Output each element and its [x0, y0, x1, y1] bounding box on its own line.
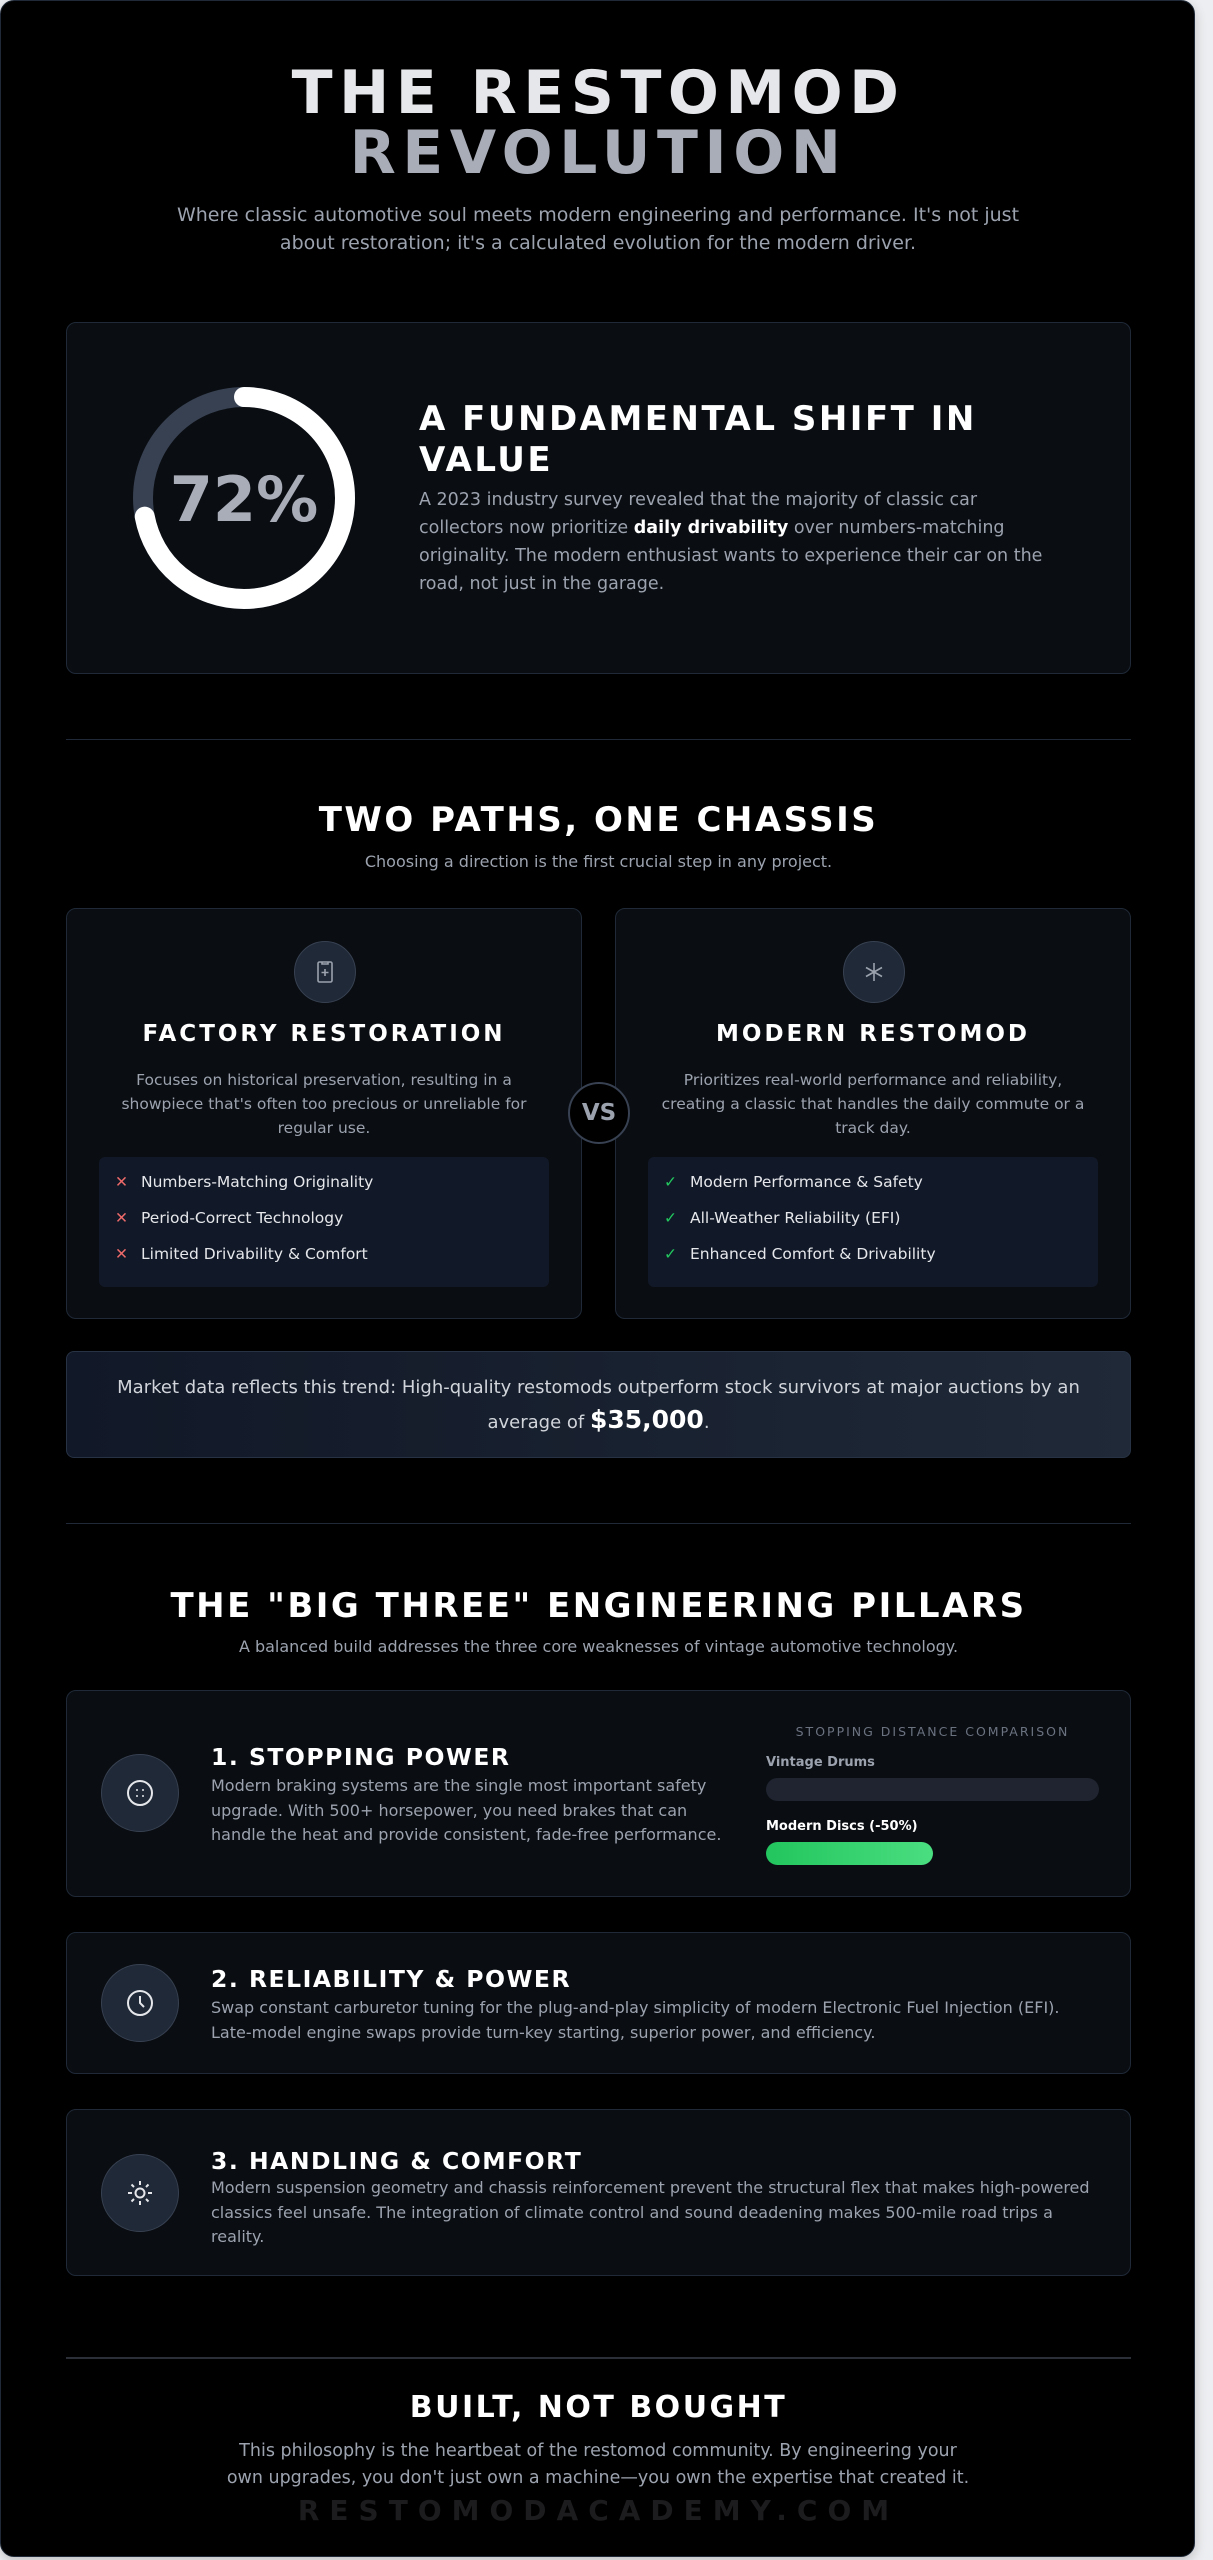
list: drawbacks: ✕ [115, 1245, 128, 1263]
pillar description: Late-model engine swaps provide turn-key starting, superior power, and efficiency. [211, 2022, 875, 2042]
panel: reliability [66, 1932, 1131, 2074]
footer text: This philosophy is the heartbeat of the restomod community. By engineering your [239, 2441, 957, 2461]
panel: stopping power [66, 1690, 1131, 1897]
card title: FACTORY RESTORATION [142, 1021, 506, 1047]
pillar title: 2. RELIABILITY & POWER [211, 1965, 571, 1993]
description: Prioritizes real-world performance and reliability, creating a classic that handles the daily commute or a track day. [662, 1071, 1084, 1137]
list: drawbacks: ✕ [115, 1209, 128, 1227]
list: drawbacks [99, 1157, 549, 1287]
heading: A FUNDAMENTAL SHIFT IN VALUE [419, 399, 977, 480]
callout: market data: Market data reflects this trend: High-quality restomods outperform stock survivors at major auctions by an average of $35,000. [117, 1377, 1080, 1434]
bar chart: stopping distance [766, 1724, 1099, 1865]
donut chart 72%: 72% [170, 463, 318, 536]
subtitle: Where classic automotive soul meets modern engineering and performance. It's not just about restoration; it's a calculated evolution for the modern driver. [177, 204, 1019, 254]
heading: big three: THE "BIG THREE" ENGINEERING PILLARS [170, 1586, 1027, 1626]
list: drawbacks: Limited Drivability & Comfort [141, 1245, 368, 1263]
pillar description: Swap constant carburetor tuning for the plug-and-play simplicity of modern Electronic Fuel Injection (EFI). [211, 1998, 1060, 2017]
list: benefits: Enhanced Comfort & Drivability [690, 1245, 936, 1263]
callout: market data [66, 1351, 1131, 1458]
VS badge: VS [582, 1100, 616, 1126]
pillar description: handle the heat and provide consistent, fade-free performance. [211, 1825, 721, 1844]
pillar description [211, 1776, 721, 1844]
list: benefits: Modern Performance & Safety [690, 1173, 923, 1191]
list: benefits: All-Weather Reliability (EFI) [690, 1209, 900, 1227]
VS badge [568, 1082, 630, 1144]
icon: sun [101, 2154, 179, 2232]
pillar description [211, 1998, 1060, 2042]
heading: two paths: TWO PATHS, ONE CHASSIS [319, 800, 878, 840]
panel: handling [66, 2109, 1131, 2276]
footer text: own upgrades, you don't just own a machine—you own the expertise that created it. [227, 2468, 969, 2488]
icon: document [294, 941, 356, 1003]
list: benefits: ✓ [664, 1173, 677, 1191]
panel: factory restoration [66, 908, 582, 1319]
icon: brake disc [101, 1754, 179, 1832]
pillar description: upgrade. With 500+ horsepower, you need brakes that can [211, 1800, 687, 1820]
paragraph [419, 490, 1042, 594]
icon: spark [843, 941, 905, 1003]
panel: fundamental shift [66, 322, 1131, 674]
icon: clock [101, 1964, 179, 2042]
title: THE RESTOMOD [292, 58, 905, 128]
footer heading: BUILT, NOT BOUGHT [410, 2390, 787, 2425]
paragraph: A 2023 industry survey revealed that the majority of classic car [419, 490, 977, 510]
donut chart 72% [133, 387, 355, 609]
subheading: A balanced build addresses the three core weaknesses of vintage automotive technology. [239, 1637, 958, 1656]
pillar description: Modern suspension geometry and chassis reinforcement prevent the structural flex that makes high-powered classics feel unsafe. The integration of climate control and sound deadening makes 500-mile road trips a reality. [211, 2178, 1090, 2246]
footer brand: RESTOMODACADEMY.COM [298, 2494, 899, 2527]
paragraph: originality. The modern enthusiast wants to experience their car on the [419, 546, 1042, 566]
list: benefits: ✓ [664, 1245, 677, 1263]
pillar description: Modern braking systems are the single most important safety [211, 1776, 706, 1795]
list: benefits [648, 1157, 1098, 1287]
subheading: Choosing a direction is the first crucial step in any project. [365, 852, 832, 871]
list: benefits: ✓ [664, 1209, 677, 1227]
title [292, 58, 905, 188]
paragraph: road, not just in the garage. [419, 574, 664, 594]
list: drawbacks: ✕ [115, 1173, 128, 1191]
card title: MODERN RESTOMOD [716, 1021, 1030, 1047]
footer text [227, 2441, 969, 2488]
pillar title: 3. HANDLING & COMFORT [211, 2147, 582, 2175]
pillar title: 1. STOPPING POWER [211, 1743, 510, 1771]
title: REVOLUTION [350, 118, 847, 188]
description: Focuses on historical preservation, resulting in a showpiece that's often too precious or unreliable for regular use. [121, 1071, 527, 1137]
bar chart: stopping distance: Vintage Drums [766, 1755, 875, 1770]
paragraph: collectors now prioritize daily drivability over numbers-matching [419, 518, 1005, 538]
bar chart: stopping distance: STOPPING DISTANCE COMPARISON [796, 1724, 1069, 1739]
list: drawbacks: Numbers-Matching Originality [141, 1173, 373, 1191]
panel: modern restomod [615, 908, 1131, 1319]
list: drawbacks: Period-Correct Technology [141, 1209, 343, 1227]
bar chart: stopping distance: Modern Discs (-50%) [766, 1819, 918, 1834]
